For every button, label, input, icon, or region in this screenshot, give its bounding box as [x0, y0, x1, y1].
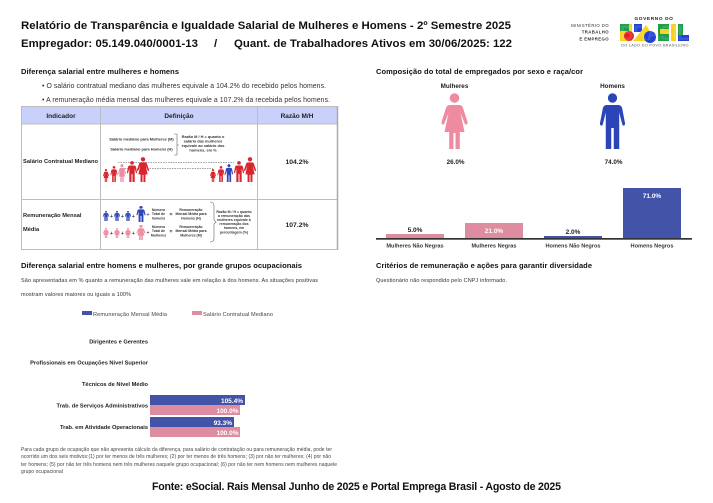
bar chart: raça/cor: 21.0%: [485, 228, 503, 235]
diagram: remuneração média: Mulheres: [151, 234, 166, 238]
bar chart: raça/cor: Mulheres Não Negras: [386, 244, 444, 250]
text block: explicação: mostram valores maiores ou iguais a 100%: [21, 292, 131, 298]
diagram: salário mediano: Razão M / H = quanto o: [182, 134, 225, 139]
bar chart: raça/cor: Homens Negros: [631, 244, 673, 250]
diagram: salário mediano: Salário mediano para Mulheres (M): [109, 136, 174, 142]
diagram: remuneração média: [103, 202, 252, 242]
diagram: remuneração média: remuneração dos: [219, 222, 249, 226]
diagram: salário mediano: homens, em %: [189, 148, 217, 152]
diagram: remuneração média: +: [132, 214, 135, 220]
diagram: remuneração média: +: [121, 231, 124, 237]
bar chart: grupos ocupacionais: Trab. em Atividade Operacionais: [60, 425, 148, 431]
logo: ministério e governo do Brasil: BRASIL: [620, 22, 689, 45]
title: Relatório de Transparência e Igualdade Salarial de Mulheres e Homens - 2º Semestre 2025: [21, 20, 512, 32]
table: indicadores: 104.2%: [285, 159, 309, 166]
diagram: salário mediano: [103, 134, 256, 182]
footnote: ter homens; (5) por não ter três homens nem três mulheres naquele grupo ocupacional; (6) por não ter nem homens nem mulheres naquele: [21, 462, 337, 468]
diagram: remuneração média: Mulheres (M): [180, 234, 202, 238]
diagram: remuneração média: +: [121, 214, 124, 220]
logo: ministério e governo do Brasil: MINISTÉRIO DO: [571, 23, 609, 28]
footnote: grupo ocupacional: [21, 469, 63, 475]
text block: explicação: São apresentadas em % quanto a remuneração das mulheres vale em relação à dos homens. As situações positivas: [21, 278, 318, 284]
bar chart: grupos ocupacionais: 100.0%: [216, 430, 239, 437]
table: indicadores: Definição: [164, 113, 194, 120]
table: indicadores: Média: [23, 227, 40, 233]
diagram: remuneração média: +: [132, 231, 135, 237]
bar chart: grupos ocupacionais: Técnicos de Nível Médio: [82, 382, 149, 388]
bar chart: grupos ocupacionais: 93.3%: [214, 420, 232, 427]
diagram: remuneração média: Razão M / H = quanto: [216, 210, 252, 214]
table: indicadores: 107.2%: [285, 222, 309, 229]
diagram: remuneração média: homens: [152, 216, 165, 220]
footnote: [21, 447, 337, 475]
bar chart: raça/cor: Mulheres Negras: [471, 244, 517, 250]
icon: mulheres: [441, 83, 469, 166]
bar chart: grupos ocupacionais: [30, 340, 245, 437]
diagram: remuneração média: percentagem (%): [220, 230, 248, 234]
diagram: salário mediano: salário das mulheres: [184, 138, 222, 144]
diagram: remuneração média: +: [110, 231, 113, 237]
footnote: ocorrido um dos seis motivos:(1) por ter menos de três mulheres; (2) por ter menos de três homens; (3) por não ter mulheres; (4) por não: [21, 454, 331, 460]
heading: critérios: Critérios de remuneração e ações para garantir diversidade: [376, 261, 592, 270]
bar chart: raça/cor: Homens Não Negros: [545, 244, 601, 250]
heading: diferença salarial: Diferença salarial entre mulheres e homens: [21, 67, 179, 76]
bar chart: raça/cor: 71.0%: [643, 193, 661, 200]
diagram: remuneração média: Número: [152, 208, 165, 212]
bullet text block: [42, 83, 330, 104]
table: indicadores: Remuneração Mensal: [23, 213, 82, 219]
table: indicadores: [22, 106, 338, 250]
text block: critérios: Questionário não respondido pelo CNPJ informado.: [376, 278, 507, 284]
table: indicadores: Razão M/H: [281, 113, 314, 120]
heading: composição: Composição do total de empregados por sexo e raça/cor: [376, 67, 583, 76]
diagram: remuneração média: Número: [152, 225, 165, 229]
bullet text block: • A remuneração média mensal das mulheres equivale a 107.2% da recebida pelos homens.: [42, 97, 330, 104]
diagram: salário mediano: Salário mediano para Homens (H): [110, 146, 173, 152]
logo: ministério e governo do Brasil: GOVERNO DO: [634, 16, 674, 22]
title: /: [214, 38, 218, 50]
diagram: salário mediano: equivale ao salário dos: [182, 143, 224, 148]
title: Quant. de Trabalhadores Ativos em 30/06/2025: 122: [234, 38, 512, 50]
bar chart: raça/cor: 2.0%: [566, 229, 581, 236]
diagram: remuneração média: Total de: [152, 212, 165, 216]
diagram: remuneração média: Homens (H): [181, 216, 201, 220]
diagram: remuneração média: mulheres equivale à: [217, 218, 251, 222]
diagram: remuneração média: Mensal Média para: [175, 229, 207, 233]
logo: ministério e governo do Brasil: E EMPREGO: [579, 36, 609, 42]
diagram: remuneração média: =: [170, 212, 173, 218]
icon: mulheres: 26.0%: [447, 159, 465, 166]
legend: [82, 311, 273, 318]
bar chart: grupos ocupacionais: Profissionais em Ocupações Nível Superior: [30, 360, 149, 366]
diagram: remuneração média: Remuneração: [179, 225, 203, 229]
legend: Salário Contratual Mediano: [203, 312, 273, 318]
title: Empregador: 05.149.040/0001-13: [21, 38, 198, 50]
diagram: remuneração média: ÷: [147, 230, 150, 236]
icon: mulheres: Mulheres: [441, 83, 469, 90]
logo: ministério e governo do Brasil: [571, 16, 689, 48]
heading: grupos ocupacionais: Diferença salarial entre homens e mulheres, por grande grupos ocupacionais: [21, 261, 302, 270]
bar chart: raça/cor: 5.0%: [408, 227, 423, 234]
diagram: remuneração média: =: [170, 229, 173, 235]
diagram: remuneração média: Mensal Média para: [175, 212, 207, 216]
bar chart: grupos ocupacionais: 100.0%: [216, 408, 239, 415]
icon: homens: Homens: [600, 83, 625, 90]
footnote: Para cada grupo de ocupação que não apresenta cálculo da diferença, para salário de contratação ou para remuneração média, pode ter: [21, 447, 332, 453]
diagram: remuneração média: a remuneração das: [218, 214, 250, 218]
diagram: remuneração média: Total de: [152, 229, 165, 233]
footer source: Fonte: eSocial. Rais Mensal Junho de 2025 e Portal Emprega Brasil - Agosto de 2025: [152, 481, 561, 493]
bar chart: raça/cor: [376, 188, 692, 250]
table: indicadores: Indicador: [46, 113, 76, 120]
diagram: remuneração média: +: [110, 214, 113, 220]
legend: Remuneração Mensal Média: [93, 312, 168, 318]
bar chart: grupos ocupacionais: Dirigentes e Gerentes: [89, 340, 148, 346]
icon: homens: [600, 83, 625, 166]
diagram: remuneração média: homens, em: [224, 226, 244, 230]
logo: ministério e governo do Brasil: DO LADO DO POVO BRASILEIRO: [621, 44, 689, 48]
bar chart: grupos ocupacionais: Trab. de Serviços Administrativos: [57, 404, 148, 410]
logo: ministério e governo do Brasil: TRABALHO: [582, 30, 609, 34]
text block: explicação: [21, 278, 318, 298]
table: indicadores: Salário Contratual Mediano: [23, 159, 99, 165]
bar chart: grupos ocupacionais: 105.4%: [221, 398, 243, 405]
title: [21, 20, 512, 50]
bullet text block: • O salário contratual mediano das mulheres equivale a 104.2% do recebido pelos homens.: [42, 83, 326, 90]
diagram: remuneração média: ÷: [147, 212, 150, 218]
icon: homens: 74.0%: [605, 159, 623, 166]
diagram: remuneração média: Remuneração: [179, 208, 203, 212]
